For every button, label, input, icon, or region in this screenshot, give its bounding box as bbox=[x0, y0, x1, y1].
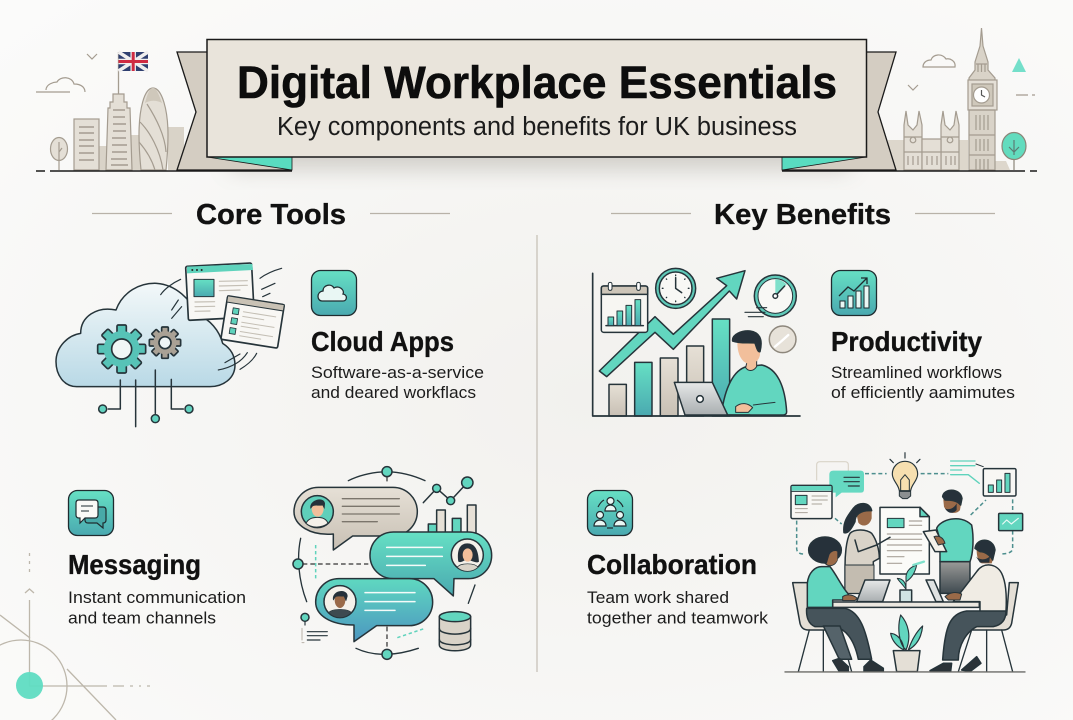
document bbox=[880, 507, 929, 574]
lightbulb bbox=[890, 453, 920, 499]
title: Digital Workplace Essentials bbox=[237, 57, 837, 108]
icon: cloud right bbox=[923, 55, 955, 67]
cloud bbox=[56, 283, 235, 387]
illustration: collaboration bbox=[785, 453, 1025, 672]
document note bbox=[301, 613, 327, 643]
bubble teal bbox=[370, 532, 492, 596]
illustration: cloud apps bbox=[56, 263, 284, 427]
heading: cloud apps: Cloud Apps bbox=[311, 326, 454, 357]
ribbon left tail bbox=[177, 52, 292, 170]
arrow bbox=[599, 271, 745, 377]
tree left bbox=[50, 138, 68, 170]
card: messaging: and team channels bbox=[68, 608, 216, 628]
teal node bbox=[16, 672, 43, 699]
chat bubble bbox=[817, 462, 864, 497]
icon: cloud apps bbox=[312, 270, 356, 316]
seated person right bbox=[930, 540, 1006, 672]
icon: productivity bbox=[832, 270, 876, 316]
seated person left bbox=[807, 537, 883, 672]
teal card bbox=[999, 513, 1023, 531]
axes bbox=[593, 273, 800, 416]
bubble blue bbox=[316, 579, 433, 642]
decoration: bottom-left geometry bbox=[0, 553, 150, 720]
flag: union jack bbox=[118, 52, 148, 71]
gherkin tower bbox=[139, 88, 168, 170]
bubble beige bbox=[294, 487, 417, 550]
right London skyline bbox=[888, 28, 1035, 170]
browser window large bbox=[186, 263, 254, 320]
browser window small bbox=[221, 296, 284, 348]
icon: teal triangle bbox=[1012, 58, 1026, 72]
card: messaging bbox=[68, 490, 246, 628]
standing person left bbox=[844, 504, 890, 593]
mini chart bbox=[423, 477, 476, 534]
orbit nodes bbox=[293, 467, 392, 659]
houses of parliament bbox=[904, 111, 959, 170]
icon: messaging bbox=[68, 490, 114, 536]
clock left bbox=[656, 268, 696, 308]
heading: key benefits: Key Benefits bbox=[714, 199, 891, 231]
chart card bbox=[976, 464, 1016, 496]
text: productivity: Streamlined workflows bbox=[831, 363, 1002, 382]
plant on table bbox=[897, 562, 924, 602]
big ben bbox=[968, 28, 997, 170]
gear teal bbox=[98, 325, 146, 373]
laptop bbox=[674, 382, 750, 415]
subtitle: Key components and benefits for UK business bbox=[277, 113, 797, 141]
orbit arcs bbox=[299, 472, 475, 654]
browser window bbox=[791, 485, 832, 519]
card: collaboration: together and teamwork bbox=[587, 608, 769, 628]
table bbox=[833, 602, 979, 607]
heading: collaboration: Collaboration bbox=[587, 549, 757, 580]
floor line bbox=[785, 670, 1025, 674]
standing person right bbox=[923, 490, 973, 593]
card: cloud apps bbox=[311, 270, 484, 402]
bars bbox=[609, 319, 730, 416]
person bbox=[722, 331, 787, 415]
ribbon right tail bbox=[782, 52, 896, 170]
icon: cloud left bbox=[36, 78, 85, 92]
text: cloud apps: Software-as-a-service bbox=[311, 363, 484, 382]
heading: core tools: Core Tools bbox=[196, 199, 346, 231]
card: cloud apps: and deared workflacs bbox=[311, 383, 476, 402]
chairs bbox=[793, 583, 1018, 672]
floor plant bbox=[891, 615, 923, 672]
title banner bbox=[207, 40, 866, 157]
icon: collaboration bbox=[588, 490, 632, 536]
clock right bbox=[745, 275, 796, 317]
connectors bbox=[797, 474, 1013, 554]
text: messaging: Instant communication bbox=[68, 588, 246, 607]
heading: productivity: Productivity bbox=[831, 326, 983, 357]
gear grey bbox=[149, 327, 181, 358]
illustration: productivity bbox=[593, 268, 800, 416]
text: collaboration: Team work shared bbox=[587, 588, 729, 607]
note lines bbox=[951, 461, 979, 483]
calendar bbox=[601, 282, 648, 332]
heading: messaging: Messaging bbox=[68, 549, 201, 580]
database bbox=[439, 612, 471, 651]
card: productivity: of efficiently aamimutes bbox=[831, 383, 1015, 402]
tower with flag pole bbox=[106, 52, 132, 170]
background blocks bbox=[86, 127, 184, 170]
dashed connectors bbox=[303, 477, 387, 649]
badge bbox=[769, 326, 796, 353]
icon: bird right bbox=[908, 85, 918, 90]
background block bbox=[888, 140, 1010, 170]
card: collaboration bbox=[587, 490, 769, 628]
left London skyline bbox=[36, 52, 184, 170]
card: productivity bbox=[831, 270, 1015, 402]
icon: bird left bbox=[87, 54, 97, 59]
office building bbox=[74, 119, 99, 170]
dash marks bbox=[1016, 94, 1035, 96]
illustration: messaging bbox=[293, 467, 492, 659]
laptops bbox=[857, 580, 943, 602]
banner shadow bbox=[230, 130, 850, 170]
ground line bbox=[36, 170, 1037, 172]
circuit lines bbox=[99, 268, 282, 427]
tree right bbox=[1002, 132, 1026, 170]
